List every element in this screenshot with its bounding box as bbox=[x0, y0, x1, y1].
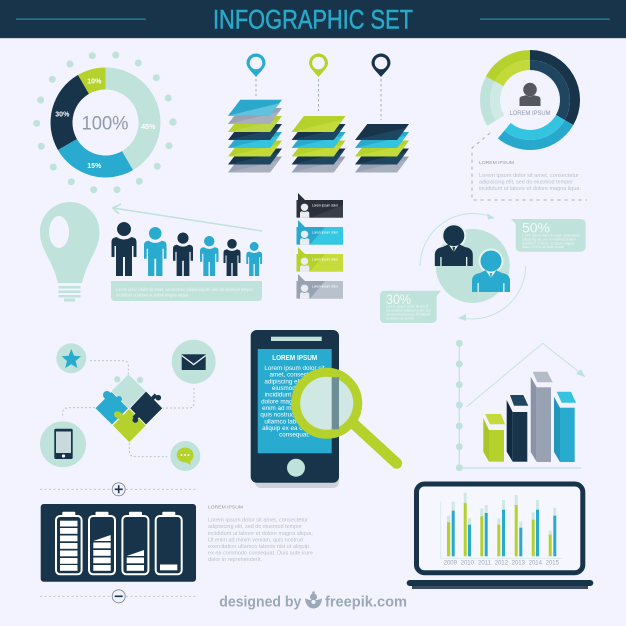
text block: battery notes: LOREM IPSUM bbox=[208, 504, 243, 510]
bar: blue bbox=[554, 392, 576, 462]
layer stack 2 bbox=[292, 116, 346, 172]
donut chart: 100 percent bbox=[33, 52, 177, 193]
map pins bbox=[246, 54, 390, 120]
phone text: eiusmod tempor bbox=[272, 385, 317, 392]
callout: 30 percent: consectetur adipiscing elit, sed bbox=[386, 308, 431, 312]
arrow: lower arc bbox=[458, 266, 526, 321]
icon: phone badge bbox=[40, 421, 86, 467]
text block: battery notes: ex ea commodo consequat. Duis aute irure bbox=[208, 550, 313, 556]
phone text: aliquip ex ea commodo bbox=[262, 425, 327, 432]
callout: 50 percent bbox=[511, 219, 586, 252]
callout: 30 percent: Lorem ipsum dolor sit amet bbox=[386, 304, 428, 308]
battery: full bbox=[56, 512, 82, 574]
year labels bbox=[444, 561, 560, 567]
callout: 30 percent: ut labore et dolore bbox=[386, 316, 414, 320]
laptop chart bbox=[407, 484, 593, 589]
icon: puzzle bbox=[95, 374, 163, 443]
year labels: 2015 bbox=[546, 561, 560, 567]
callout: blue: Lorem ipsum dolor bbox=[312, 230, 339, 234]
callout list bbox=[296, 193, 343, 299]
icon: magnifying glass bbox=[296, 372, 397, 463]
callout: 50 percent: adipiscing elit, sed do eiusmod tempor bbox=[522, 238, 577, 242]
dashed text frame: adipisicing elit, sed do eiusmod tempor bbox=[479, 180, 573, 186]
watermark: freepik: designed by bbox=[219, 595, 301, 611]
phone text: consequat. bbox=[279, 432, 310, 439]
icon: light bulb bbox=[40, 202, 100, 302]
icon: freepik logo bbox=[305, 591, 322, 608]
divider: minus bbox=[40, 590, 198, 603]
header bar bbox=[0, 0, 626, 38]
panel: batteries bbox=[41, 504, 196, 582]
battery: low bbox=[156, 512, 182, 574]
phone text: ullamco laboris nisi ut bbox=[264, 418, 325, 425]
panel: people caption: incididunt ut labore et dolore magna aliqua. bbox=[116, 292, 189, 298]
year labels: 2010 bbox=[461, 561, 475, 567]
donut chart: 100 percent: 15% bbox=[87, 163, 102, 170]
bar: navy bbox=[507, 395, 528, 462]
text block: battery notes: Lorem ipsum dolor sit amet, consectetur bbox=[208, 518, 308, 524]
phone text bbox=[260, 365, 329, 439]
phone text: amet, consectetur bbox=[269, 372, 320, 379]
bar: green bbox=[483, 414, 505, 462]
phone text: quis nostrud exercitation bbox=[260, 412, 329, 419]
smartphone bbox=[251, 330, 339, 488]
segmented ring with person: LOREM IPSUM bbox=[510, 110, 550, 117]
year labels: 2011 bbox=[478, 561, 492, 567]
donut chart: 100 percent: 45% bbox=[141, 124, 156, 131]
icon: chat badge bbox=[170, 441, 200, 471]
callout: green: Lorem ipsum dolor bbox=[312, 256, 339, 262]
icon: person bbox=[520, 83, 540, 106]
panel: people caption bbox=[111, 281, 262, 301]
text block: battery notes: incididunt ut labore et dolore magna aliqua. bbox=[208, 531, 313, 537]
watermark: freepik: freepik.com bbox=[325, 595, 407, 611]
dashed text frame: Lorem ipsum dolor sit amet, consectetur bbox=[479, 173, 579, 179]
text block: battery notes: Ut enim ad minim veniam, quis nostrud bbox=[208, 537, 303, 543]
callout: 50 percent: incididunt ut labore et dolore magna bbox=[522, 242, 574, 246]
callout: 30 percent: 30% bbox=[386, 291, 411, 307]
text block: battery notes bbox=[208, 504, 313, 563]
phone text: incididunt ut labore et bbox=[265, 392, 325, 399]
battery: medium bbox=[122, 512, 148, 574]
phone text: dolore magna aliqua. Ut bbox=[261, 398, 328, 405]
icon: navy business person bbox=[435, 223, 473, 266]
year labels: 2009 bbox=[444, 561, 458, 567]
callout: 30 percent bbox=[380, 291, 441, 323]
battery: high bbox=[89, 512, 115, 574]
callout: 30 percent: do eiusmod tempor incididunt bbox=[386, 312, 430, 316]
text block: battery notes: dolor in reprehenderit. bbox=[208, 557, 262, 563]
callout: gray: Lorem ipsum dolor bbox=[312, 284, 339, 288]
callout: dark: Lorem ipsum dolor bbox=[312, 202, 339, 208]
phone text: enim ad minim veniam, bbox=[262, 405, 327, 412]
callout: 50 percent: 50% bbox=[522, 220, 550, 236]
title: INFOGRAPHIC SET bbox=[213, 4, 413, 34]
phone heading: LOREM IPSUM bbox=[272, 353, 317, 362]
icon: mail badge bbox=[172, 340, 216, 384]
arrow: upper arc bbox=[420, 213, 495, 266]
callout: 50 percent: Lorem ipsum dolor sit amet, consectetur bbox=[522, 234, 581, 238]
arrow: trend over people bbox=[113, 204, 262, 231]
icon: blue business person bbox=[472, 248, 510, 292]
bars bbox=[447, 493, 556, 556]
arrow: trend line bbox=[467, 343, 585, 407]
layer stack 1 bbox=[228, 100, 282, 172]
year labels: 2014 bbox=[529, 561, 543, 567]
dashed text frame: LOREM IPSUM bbox=[479, 160, 514, 166]
text block: battery notes: exercitation ullamco laboris nisi ut aliquip bbox=[208, 544, 309, 550]
watermark: freepik bbox=[219, 591, 407, 611]
business people cycle bbox=[420, 213, 526, 321]
puzzle connectors bbox=[63, 361, 194, 457]
donut chart: 100 percent: 30% bbox=[55, 112, 70, 118]
dashed text frame bbox=[472, 133, 587, 200]
bar: gray bbox=[531, 372, 553, 462]
layer stack 3 bbox=[355, 124, 409, 172]
people row bbox=[112, 222, 262, 276]
text block: battery notes: adipisicing elit, sed do eiusmod tempor bbox=[208, 524, 302, 530]
donut chart: 100 percent: 100% bbox=[82, 112, 128, 134]
panel: people caption: Lorem ipsum dolor sit amet, consectetur adipiscing elit, sed do eiusmod tempor bbox=[116, 287, 253, 292]
dashed text frame: incididunt ut labore et dolore magna liqua. bbox=[479, 186, 581, 192]
3D bar chart bbox=[456, 340, 585, 471]
segmented ring with person bbox=[485, 55, 575, 145]
callout: 50 percent: aliqua. Ut enim ad minim veniam bbox=[522, 245, 564, 249]
donut chart: 100 percent: 10% bbox=[87, 78, 102, 86]
year labels: 2012 bbox=[495, 561, 509, 567]
phone text: adipiscing elit, sed do bbox=[264, 378, 325, 385]
year labels: 2013 bbox=[512, 561, 526, 567]
icon: star badge bbox=[56, 343, 86, 373]
phone text: Lorem ipsum dolor sit bbox=[264, 365, 325, 372]
divider: plus bbox=[40, 483, 198, 496]
